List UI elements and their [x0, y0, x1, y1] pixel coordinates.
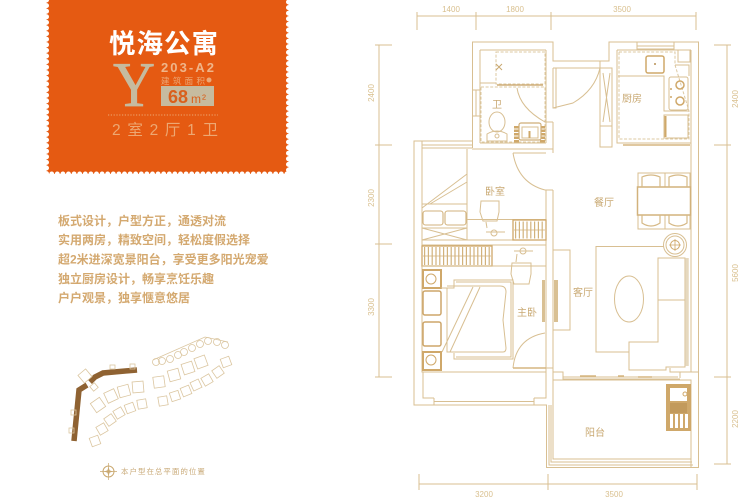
title: 悦海公寓 — [109, 29, 219, 59]
dimension: right: 2400 — [731, 90, 740, 108]
dimension: left — [367, 45, 392, 377]
wardrobe — [422, 246, 492, 266]
wash basin — [516, 123, 542, 143]
label: balcony: 阳台 — [585, 426, 605, 439]
unit letter Y: Y — [113, 50, 155, 120]
wardrobe — [513, 220, 546, 240]
washing machine — [666, 384, 691, 431]
door swing — [517, 88, 545, 122]
middle building row — [90, 355, 208, 413]
area value box: m² — [191, 92, 206, 106]
dimension: top — [417, 5, 696, 30]
door swing — [513, 333, 545, 368]
cushions — [423, 291, 441, 346]
top building row — [152, 337, 228, 366]
desk chair — [480, 201, 505, 236]
floor lamp — [664, 234, 686, 256]
text block: selling points: 实用两房，精致空间，轻松度假选择 — [58, 232, 250, 247]
room: living — [553, 234, 687, 370]
room: kitchen — [553, 50, 690, 147]
outer walls — [414, 42, 698, 468]
cooktop — [669, 77, 688, 110]
balcony door — [546, 368, 680, 380]
window lines — [422, 42, 674, 405]
room: balcony — [546, 380, 698, 468]
dimension: left: 2300 — [367, 189, 376, 207]
floor plan — [414, 42, 698, 468]
text block: selling points — [58, 213, 269, 305]
text block: selling points: 独立厨房设计，畅享烹饪乐趣 — [58, 271, 214, 286]
toilet — [487, 112, 507, 141]
area label: 建筑面积 — [161, 76, 205, 86]
sink — [646, 56, 664, 73]
label: dining: 餐厅 — [594, 196, 614, 209]
dimension: right — [714, 45, 740, 464]
text block: selling points: 板式设计，户型方正，通透对流 — [58, 213, 226, 228]
bedside cushions — [423, 211, 466, 225]
bedroom door swing — [513, 153, 545, 190]
text block: selling points: 超2米进深宽景阳台，享受更多阳光宠爱 — [58, 252, 269, 266]
site plan — [69, 337, 232, 480]
dimension: right: 5600 — [731, 264, 740, 282]
TV cabinet — [553, 250, 570, 330]
dimension: bottom: 3500 — [605, 490, 623, 499]
icon: area bubble — [206, 78, 212, 82]
panel: orange title card — [46, 0, 288, 174]
desk chair — [511, 248, 533, 284]
bedside tables — [423, 270, 441, 370]
room: master bedroom — [422, 246, 558, 370]
label: living: 客厅 — [573, 286, 593, 299]
dimension: bottom: 3200 — [475, 490, 493, 499]
dimension: top: 1400 — [442, 5, 460, 14]
dimension: right: 2200 — [731, 410, 740, 428]
label: bathroom: 卫 — [492, 100, 502, 111]
coffee table — [614, 276, 644, 322]
door swing — [553, 68, 600, 108]
fridge — [664, 115, 688, 138]
label: second bedroom: 卧室 — [485, 185, 505, 198]
dimension: top: 1800 — [506, 5, 524, 14]
label: kitchen: 厨房 — [622, 92, 642, 105]
closet door leaves — [542, 280, 558, 322]
dining table — [638, 173, 690, 229]
area value box: 68 — [168, 87, 188, 107]
site plan caption: 本户型在总平面的位置 — [121, 466, 206, 476]
unit code: 203-A2 — [161, 60, 214, 75]
area value box — [161, 86, 214, 107]
dimension: left: 3300 — [367, 298, 376, 316]
text block: selling points: 户户观景，独享惬意悠居 — [58, 290, 190, 305]
dimension: top: 3500 — [613, 5, 631, 14]
bottom building row — [89, 356, 232, 447]
room count: 2 室 2 厅 1 卫 — [112, 121, 218, 139]
rug — [596, 246, 664, 352]
bed — [441, 280, 513, 359]
highlighted building — [69, 364, 137, 441]
dimension: left: 2400 — [367, 84, 376, 102]
sliding door — [600, 61, 612, 147]
room: bathroom — [480, 52, 545, 143]
sofa — [629, 258, 687, 370]
dimension: bottom — [419, 474, 697, 499]
icon: compass — [100, 463, 117, 480]
label: master bedroom: 主卧 — [517, 306, 537, 319]
room: second bedroom — [422, 149, 546, 240]
room: dining — [594, 173, 690, 229]
